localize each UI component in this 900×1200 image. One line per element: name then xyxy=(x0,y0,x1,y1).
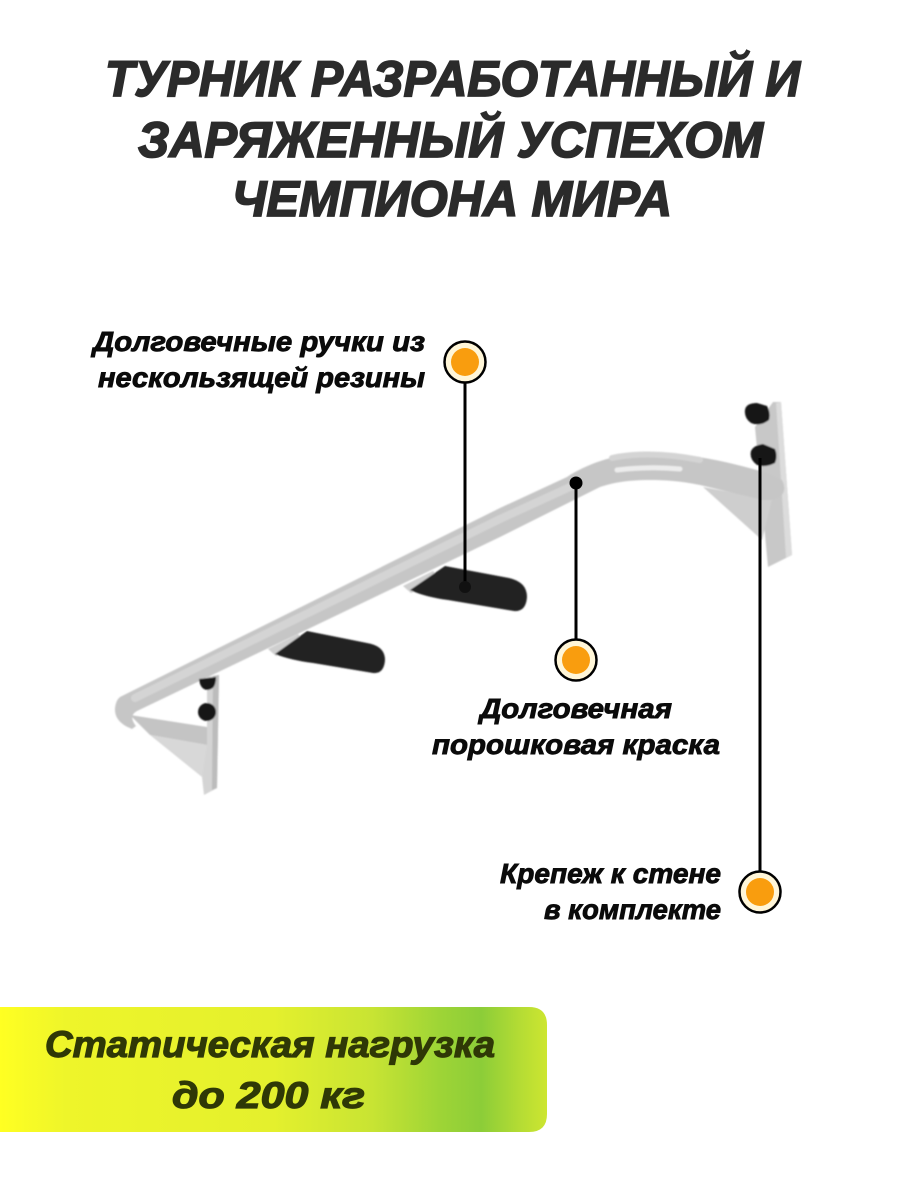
paint label: Долговечная xyxy=(478,693,672,724)
upper rubber handle xyxy=(403,566,527,611)
right wall bracket xyxy=(703,402,792,567)
mounts label xyxy=(500,858,721,925)
mounts label: Крепеж к стене xyxy=(500,858,721,889)
title xyxy=(105,50,801,227)
handles label: Долговечные ручки из xyxy=(91,326,425,357)
paint label xyxy=(432,693,720,760)
main tube xyxy=(115,453,784,729)
paint leader line xyxy=(570,476,582,641)
paint marker xyxy=(556,640,596,680)
banner text: до 200 кг xyxy=(172,1075,365,1116)
callout: powder paint xyxy=(432,476,720,760)
mounts marker xyxy=(740,872,780,912)
lower rubber handle xyxy=(268,631,385,673)
left wall bracket xyxy=(130,675,219,795)
callout: wall mounts xyxy=(500,458,780,925)
handles label: нескользящей резины xyxy=(98,362,425,393)
mounts leader line xyxy=(758,458,762,874)
mounts label: в комплекте xyxy=(544,894,721,925)
title: ЧЕМПИОНА МИРА xyxy=(232,171,672,227)
banner text: Статическая нагрузка xyxy=(45,1024,495,1065)
handles marker xyxy=(444,342,486,382)
banner: static load xyxy=(0,1007,547,1132)
wall bolts xyxy=(198,403,776,721)
callout: handles xyxy=(91,326,485,593)
handles leader line xyxy=(459,380,471,593)
paint label: порошковая краска xyxy=(432,729,720,760)
handles label xyxy=(91,326,425,393)
pull-up bar product illustration xyxy=(115,402,792,795)
banner text xyxy=(45,1024,495,1116)
title: ЗАРЯЖЕННЫЙ УСПЕХОМ xyxy=(138,111,764,168)
title: ТУРНИК РАЗРАБОТАННЫЙ И xyxy=(105,50,801,107)
